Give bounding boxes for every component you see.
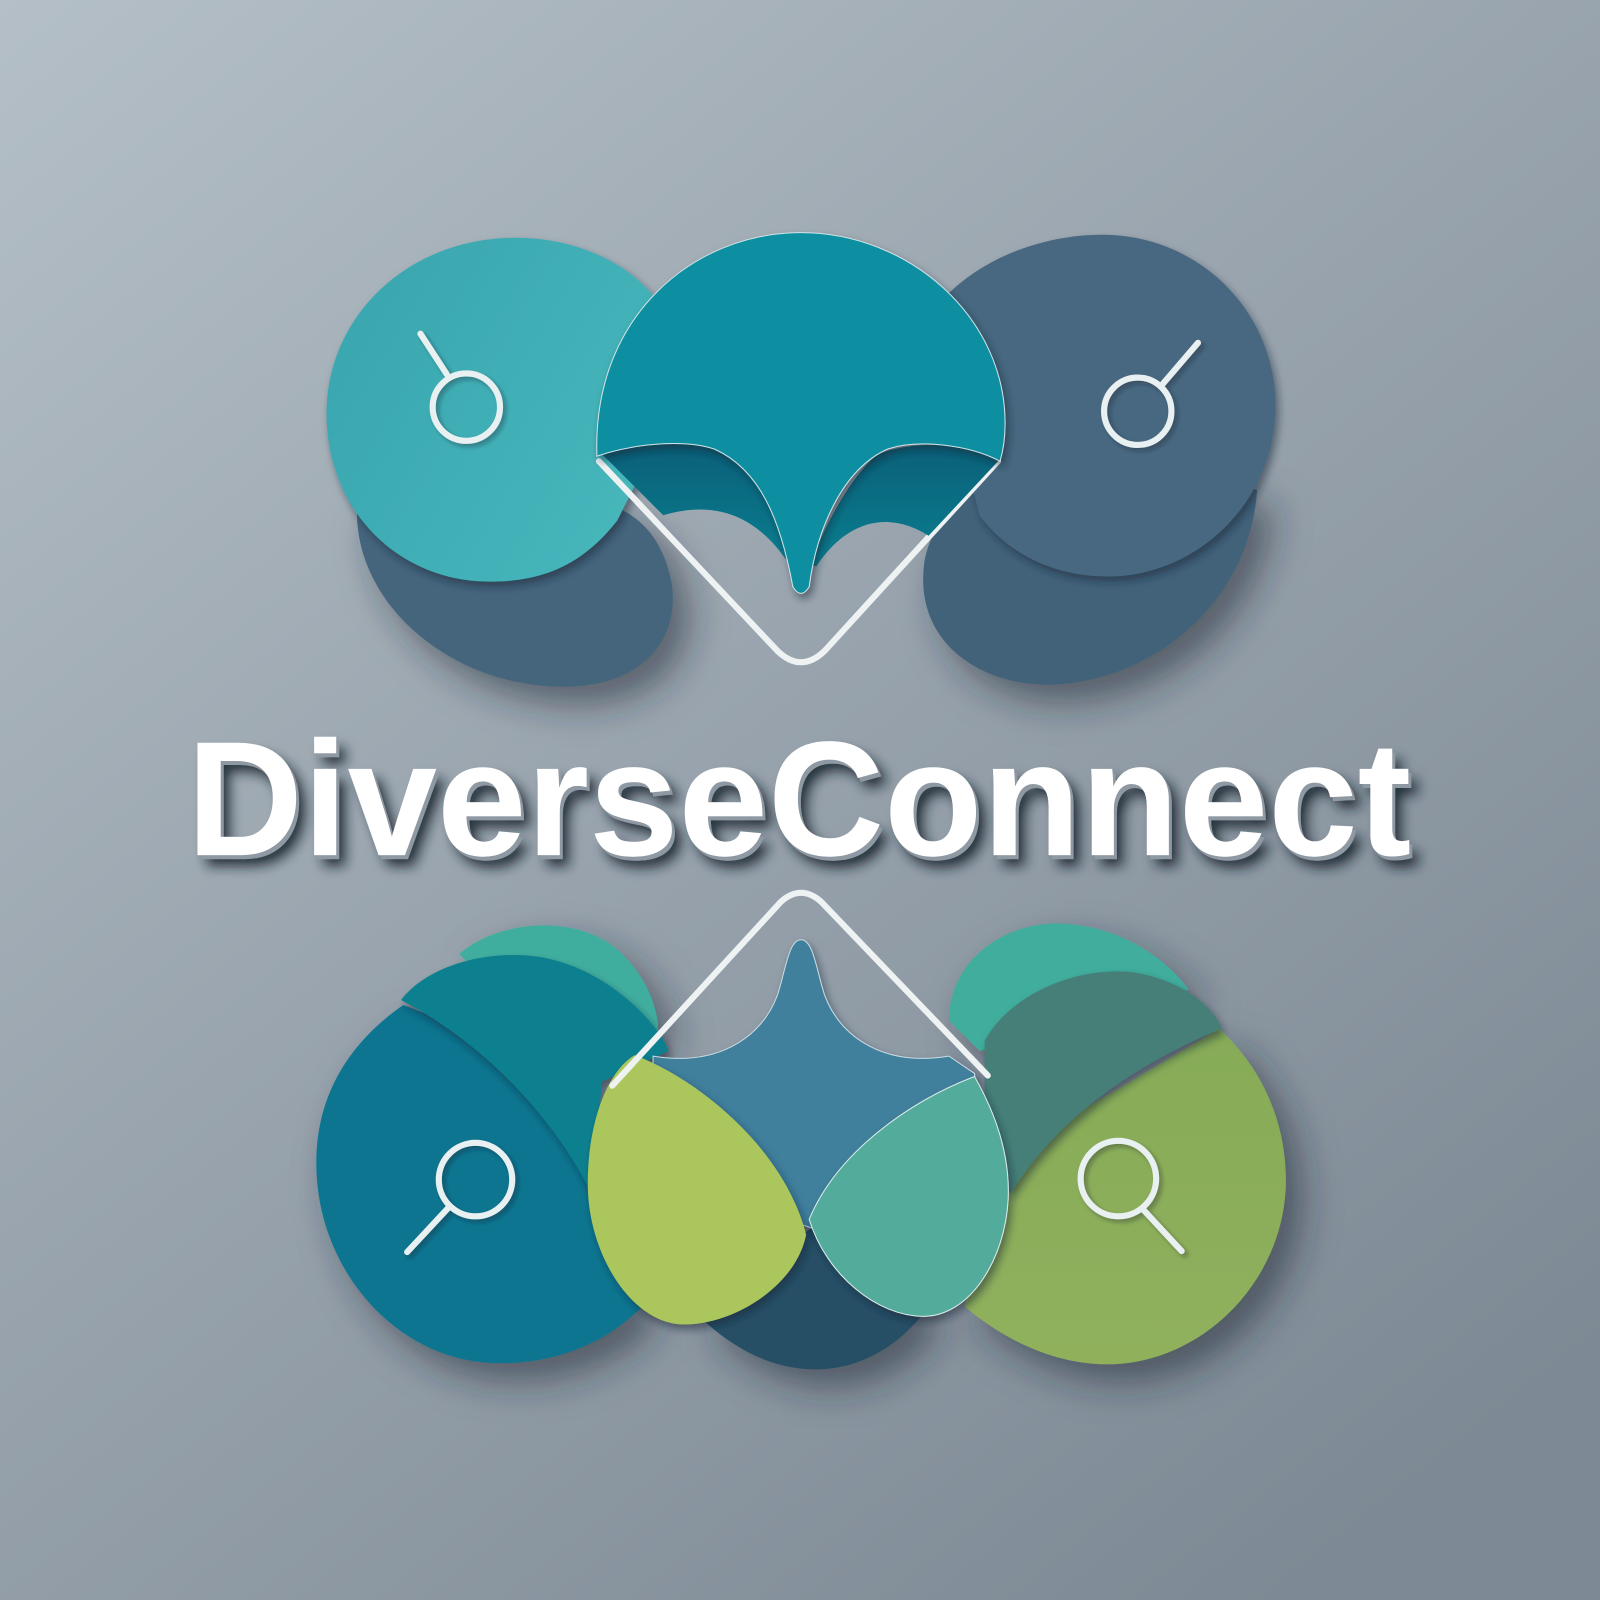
back shape right — [923, 439, 1257, 685]
left mid teal shape — [401, 955, 668, 1194]
central teal fan — [597, 233, 1005, 593]
bottom logo cluster — [316, 893, 1286, 1369]
back teal right — [949, 923, 1189, 1051]
left teal circle — [327, 238, 663, 582]
teal petal — [809, 1077, 1008, 1316]
diamond outline — [612, 893, 988, 1086]
right slate circle — [929, 235, 1276, 577]
title: DiverseConnect — [187, 707, 1411, 890]
right green circle — [964, 1029, 1286, 1364]
central blue figure — [653, 940, 985, 1230]
lime petal — [588, 1055, 806, 1324]
bottom dark lobe — [694, 1224, 929, 1369]
right mid teal-green shape — [985, 971, 1221, 1194]
central dark underside — [602, 443, 1000, 590]
icon: right magnifier — [1081, 1141, 1182, 1251]
top logo cluster — [327, 233, 1276, 687]
left blue circle — [316, 1005, 643, 1363]
back shape left — [357, 459, 673, 687]
diamond outline — [599, 461, 998, 662]
icon: left magnifier — [407, 1143, 512, 1252]
back teal left — [459, 925, 658, 1061]
icon: left magnifier — [420, 334, 500, 441]
icon: right magnifier — [1104, 343, 1198, 445]
